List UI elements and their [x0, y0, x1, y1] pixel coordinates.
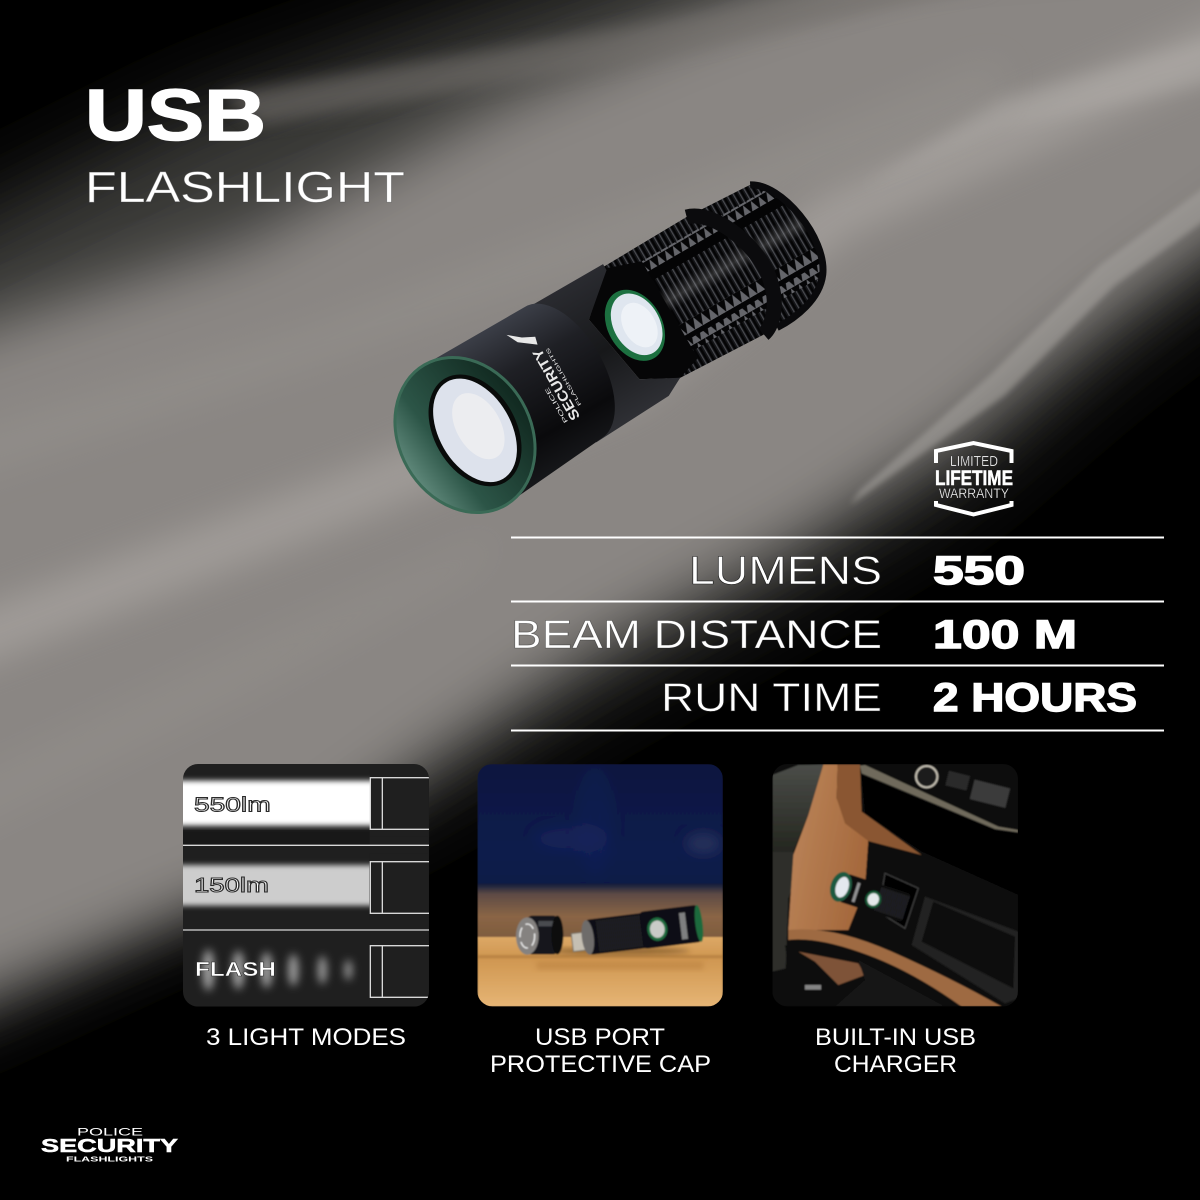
- logo: Police Security Flashlights: SECURITY: [41, 1136, 178, 1156]
- mode labels: 550lm: [194, 794, 271, 816]
- lower console: [776, 945, 828, 976]
- engraved logo: FLASHLIGHTS: [544, 345, 583, 407]
- collar: [687, 196, 793, 338]
- engraved logo: [506, 319, 588, 428]
- charging port: [878, 873, 918, 928]
- leather panel: [788, 764, 868, 930]
- tail rim: [709, 170, 844, 328]
- row: lumens: LUMENS: [689, 549, 882, 593]
- logo: Police Security Flashlights: [41, 1126, 178, 1164]
- badge text: WARRANTY: [939, 485, 1010, 501]
- head face ring and lens: [367, 332, 563, 538]
- row: beam distance: 100 M: [933, 613, 1077, 657]
- charging flashlight: [826, 869, 911, 923]
- cap: [516, 916, 563, 955]
- caption: USB port protective cap: [490, 1024, 711, 1078]
- beam: flash pulses: [202, 949, 352, 991]
- flashlight neck: [512, 259, 687, 447]
- usb flashlight logo: [679, 912, 688, 940]
- row: run time: [661, 676, 1137, 720]
- shifter boot: [772, 851, 794, 972]
- caption: USB port protective cap: USB PORT: [535, 1024, 665, 1051]
- engraved logo: SECURITY: [529, 345, 583, 423]
- flashlight product image: [393, 181, 826, 514]
- caption: USB port protective cap: PROTECTIVE CAP: [490, 1051, 711, 1078]
- center console: [848, 841, 1018, 1007]
- beam: 150lm: [170, 865, 383, 906]
- mode labels: FLASH: [195, 959, 276, 981]
- badge frame: [936, 443, 1012, 514]
- row: lumens: [689, 549, 1025, 593]
- panel: 3 light modes: [170, 764, 430, 1007]
- row: lumens: 550: [933, 549, 1025, 593]
- engraved logo: POLICE: [545, 386, 570, 424]
- caption: 3 light modes: 3 LIGHT MODES: [206, 1024, 406, 1051]
- row: run time: RUN TIME: [661, 676, 882, 720]
- charging flashlight logo: [852, 882, 861, 902]
- warranty badge: [935, 443, 1013, 514]
- power button: [593, 279, 677, 372]
- badge text: [935, 453, 1013, 501]
- caption: built-in USB charger: [815, 1024, 976, 1078]
- flashlight head barrel: [424, 287, 641, 505]
- seat side: [772, 764, 823, 852]
- logo: Police Security Flashlights: FLASHLIGHTS: [66, 1156, 154, 1164]
- mode labels: [194, 794, 276, 981]
- mode labels: 150lm: [194, 875, 269, 897]
- specs table: [511, 538, 1164, 730]
- usb flashlight button: [646, 916, 669, 942]
- upper console: [880, 764, 935, 788]
- charging flashlight button: [864, 890, 882, 910]
- row: beam distance: BEAM DISTANCE: [511, 613, 882, 657]
- flashlight outlines: [370, 778, 430, 829]
- button plate: [571, 251, 702, 403]
- caption: built-in USB charger: BUILT-IN USB: [815, 1024, 976, 1051]
- row: run time: 2 HOURS: [933, 676, 1137, 720]
- tan trim: [788, 929, 1002, 1007]
- panel: built-in USB charger: [772, 764, 1018, 1007]
- usb flashlight: [570, 904, 705, 958]
- usb connector: [570, 932, 586, 952]
- logo: Police Security Flashlights: POLICE: [77, 1126, 143, 1138]
- title: [85, 76, 405, 212]
- flashlight grip and tail: [604, 181, 826, 379]
- badge text: LIMITED: [950, 453, 998, 470]
- subtitle: FLASHLIGHT: FLASHLIGHT: [85, 163, 405, 212]
- row: beam distance: [511, 613, 1077, 657]
- caption: built-in USB charger: CHARGER: [834, 1051, 957, 1078]
- title: USB: USB: [85, 76, 266, 156]
- badge text: LIFETIME: [935, 467, 1013, 490]
- beam: 550lm: [170, 781, 383, 826]
- panel: USB port protective cap: [477, 764, 723, 1007]
